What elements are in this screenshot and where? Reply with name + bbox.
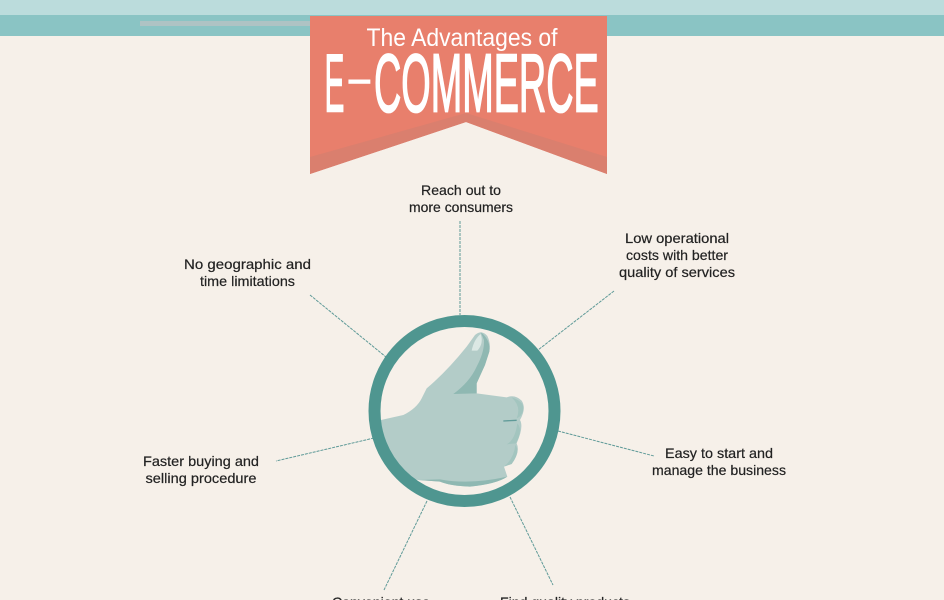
label: low operational costs <box>619 230 735 280</box>
label: no geographic limits: time limitations <box>200 273 295 289</box>
title line: The Advantages of: The Advantages of <box>366 24 558 52</box>
title line: E-COMMERCE: E <box>324 38 344 130</box>
title banner <box>310 16 607 174</box>
label: no geographic limits <box>184 256 311 289</box>
label: easy to start: manage the business <box>652 462 786 478</box>
label: faster buying <box>143 453 259 486</box>
title line: E-COMMERCE: COMMERCE <box>374 37 599 130</box>
label: low operational costs: costs with better <box>626 247 728 263</box>
label: easy to start: Easy to start and <box>665 445 773 461</box>
top header band <box>0 0 944 36</box>
label: low operational costs: Low operational <box>625 230 729 246</box>
label: reach out <box>409 182 513 215</box>
label: no geographic limits: No geographic and <box>184 256 311 272</box>
icon: thumbs up hand <box>373 332 524 487</box>
connector lines <box>276 221 654 590</box>
label: easy to start <box>652 445 786 478</box>
ring around hand <box>374 321 554 501</box>
label: faster buying: Faster buying and <box>143 453 259 469</box>
label: faster buying: selling procedure <box>146 470 257 486</box>
title line: E-COMMERCE: - <box>346 58 372 99</box>
label: reach out: Reach out to <box>421 182 501 198</box>
label: low operational costs: quality of services <box>619 264 735 280</box>
label: reach out: more consumers <box>409 199 513 215</box>
